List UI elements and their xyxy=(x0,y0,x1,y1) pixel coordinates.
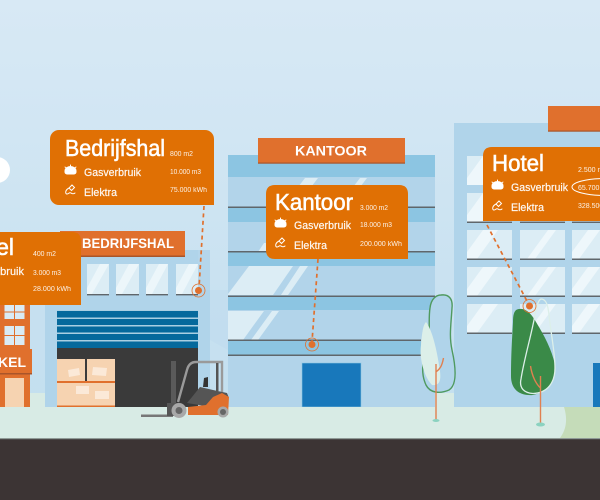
building: kantoor xyxy=(228,155,435,407)
label: kantoor xyxy=(258,138,405,164)
callout: bedrijfshal: 800 m2 xyxy=(170,151,193,158)
icon: plug xyxy=(276,238,285,247)
callout: bedrijfshal: 75.000 kWh xyxy=(170,187,207,194)
building: bedrijfshal xyxy=(30,250,228,407)
label: bedrijfshal xyxy=(60,231,185,257)
icon: gas xyxy=(275,218,286,227)
callout: winkel xyxy=(0,232,81,305)
icon: plug xyxy=(493,201,502,210)
road xyxy=(0,438,600,500)
callout: winkel: 400 m2 xyxy=(33,251,56,258)
callout: bedrijfshal: Bedrijfshal xyxy=(65,135,165,161)
callout: bedrijfshal: Elektra xyxy=(84,187,118,199)
marker: hotel xyxy=(523,300,536,312)
leader: bedrijfshal xyxy=(199,206,204,288)
callout: kantoor: Gasverbruik xyxy=(294,220,351,232)
callout: kantoor: 200.000 kWh xyxy=(360,241,402,248)
door xyxy=(302,363,361,407)
callout: bedrijfshal xyxy=(50,130,214,205)
cloud xyxy=(0,157,10,183)
hotel door xyxy=(593,363,600,407)
callout: winkel: 3.000 m3 xyxy=(33,270,61,277)
callout: kantoor: Elektra xyxy=(294,240,328,252)
roller shutter xyxy=(57,310,198,349)
callout: bedrijfshal: 10.000 m3 xyxy=(170,169,201,176)
windows xyxy=(87,264,198,295)
label: bedrijfshal: BEDRIJFSHAL xyxy=(82,235,174,251)
callout: kantoor: Kantoor xyxy=(275,189,353,215)
label: kantoor: KANTOOR xyxy=(295,142,367,158)
grass patch xyxy=(560,407,600,438)
hotel windows xyxy=(467,156,600,334)
marker: bedrijfshal xyxy=(192,284,205,297)
callout: winkel: 28.000 kWh xyxy=(33,286,71,293)
icon: plug xyxy=(66,185,75,194)
loading bay door xyxy=(57,348,198,407)
marker: kantoor xyxy=(306,338,318,351)
callout: bedrijfshal: Gasverbruik xyxy=(84,167,141,179)
window bands xyxy=(228,155,435,355)
callout: hotel xyxy=(483,147,600,221)
stacked boxes xyxy=(57,359,115,407)
label: hotel xyxy=(548,106,600,132)
callout: kantoor: 3.000 m2 xyxy=(360,205,388,212)
leader: hotel xyxy=(487,225,528,303)
ground xyxy=(0,407,600,438)
window glare xyxy=(228,178,367,340)
leader: kantoor xyxy=(312,259,318,342)
forklift xyxy=(141,361,229,418)
icon: gas xyxy=(492,180,503,189)
tree: filled right tree xyxy=(511,299,555,426)
callout: hotel: Gasverbruik xyxy=(511,182,568,194)
callout: kantoor xyxy=(266,185,408,259)
callout: kantoor: 18.000 m3 xyxy=(360,222,392,229)
building: winkel xyxy=(0,300,32,407)
tree: outlined left tree xyxy=(421,295,455,422)
callout: hotel: Hotel xyxy=(492,150,544,176)
ground strips between buildings xyxy=(30,393,454,407)
building: hotel xyxy=(454,123,600,407)
callout: hotel: Elektra xyxy=(511,202,545,214)
icon: gas xyxy=(65,165,76,174)
highlight ellipse xyxy=(572,178,600,196)
